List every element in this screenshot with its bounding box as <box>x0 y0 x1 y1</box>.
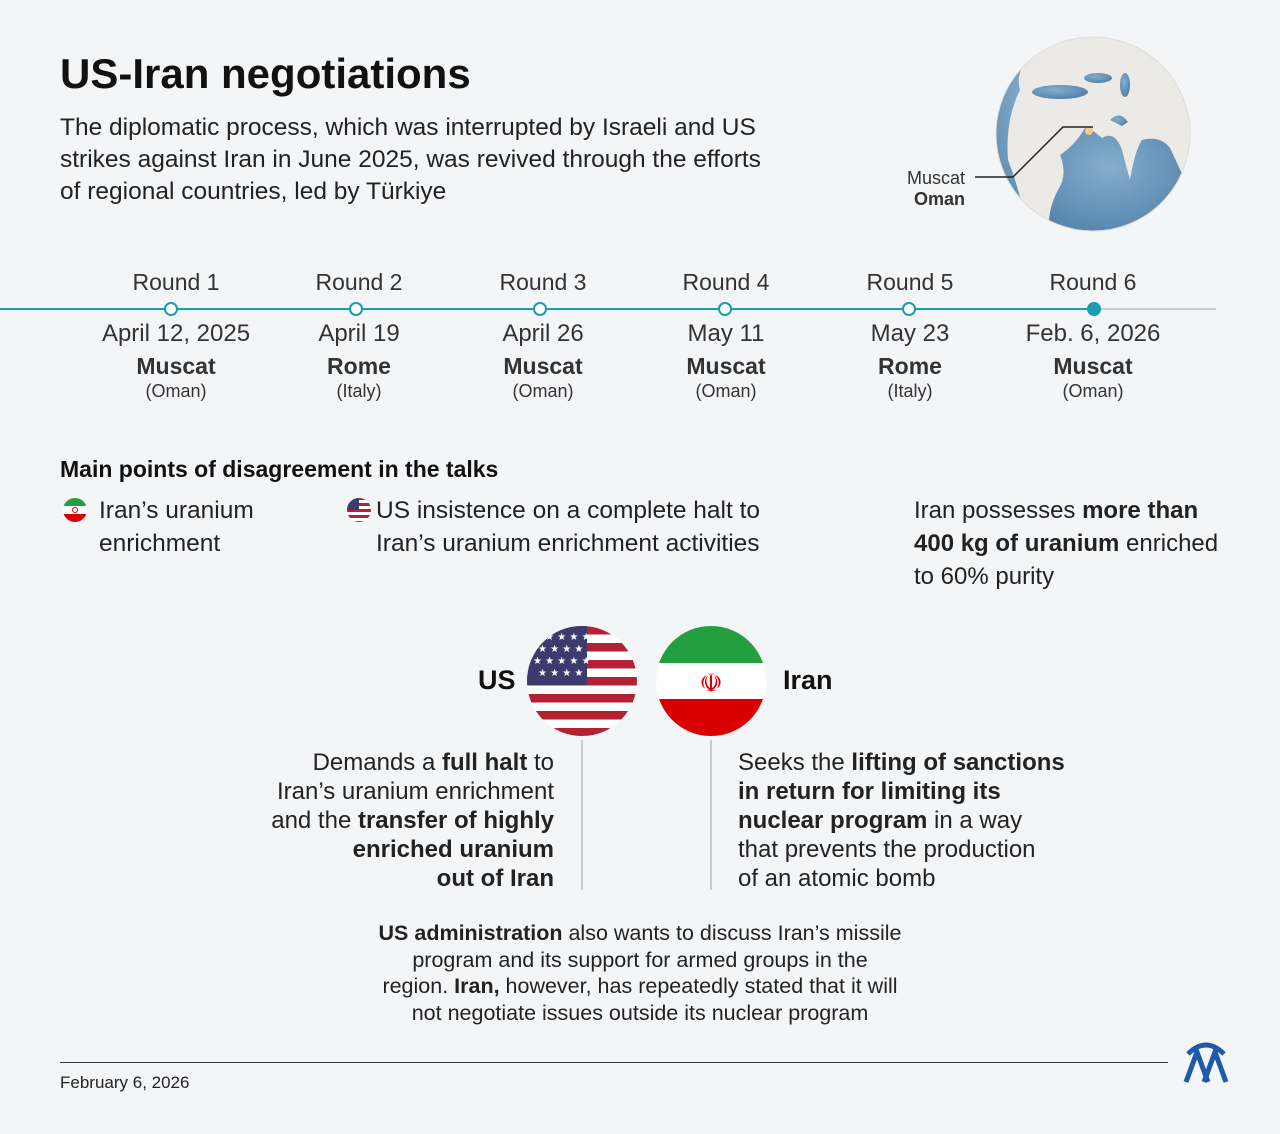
point: Iran <box>63 497 254 557</box>
date: February 6, 2026 <box>60 1073 189 1092</box>
Iran demands: nuclear program in a way <box>738 807 1022 834</box>
round 1: April 12, 2025 <box>102 320 250 347</box>
note: US administration also wants to discuss Iran’s missile <box>379 921 901 945</box>
Iran demands: Seeks the lifting of sanctions <box>738 749 1065 776</box>
round 4: May 11 <box>688 320 764 347</box>
round 1: (Oman) <box>145 381 206 401</box>
round 3 <box>500 269 586 401</box>
round 1: Round 1 <box>133 269 219 295</box>
label Iran: Iran <box>783 665 833 695</box>
timeline line <box>0 302 1216 316</box>
round 4: Muscat <box>686 353 766 379</box>
round 4 <box>683 269 769 401</box>
US flag circle: ★ ★ ★ ★ ★ <box>533 656 591 667</box>
round 6: Round 6 <box>1050 269 1136 295</box>
note: not negotiate issues outside its nuclear program <box>412 1000 868 1024</box>
round 5: Rome <box>878 353 942 379</box>
round 4: (Oman) <box>695 381 756 401</box>
round 4: Round 4 <box>683 269 769 295</box>
uranium stat: Iran possesses more than <box>914 497 1198 524</box>
round 6: Muscat <box>1053 353 1133 379</box>
uranium stat: to 60% purity <box>914 563 1054 590</box>
label US: US <box>478 665 516 695</box>
US flag circle: ★ ★ ★ ★ <box>538 668 583 679</box>
point: US: Iran’s uranium enrichment activities <box>376 530 760 557</box>
subtitle: of regional countries, led by Türkiye <box>60 178 446 205</box>
point: Iran: Iran’s uranium <box>99 497 254 524</box>
Iran demands: of an atomic bomb <box>738 865 935 892</box>
US demands: enriched uranium <box>353 836 554 863</box>
round 5: (Italy) <box>888 381 932 401</box>
logo AA <box>1184 1042 1228 1083</box>
US flag circle: ★ ★ ★ ★ <box>538 644 583 655</box>
round 2: (Italy) <box>336 381 382 401</box>
round 2: Rome <box>327 353 391 379</box>
Iran demands <box>738 749 1065 892</box>
globe map: Muscat <box>907 168 965 188</box>
globe map <box>907 36 1190 232</box>
round 1: Muscat <box>136 353 216 379</box>
subtitle: The diplomatic process, which was interrupted by Israeli and US <box>60 114 756 141</box>
round 2 <box>316 269 402 401</box>
US demands: and the transfer of highly <box>271 807 554 834</box>
round 3: (Oman) <box>512 381 574 401</box>
point: Iran: enrichment <box>99 530 220 557</box>
round 5: May 23 <box>871 320 949 347</box>
footer line <box>60 1062 1168 1063</box>
globe map: Oman <box>914 189 965 209</box>
uranium stat <box>914 497 1218 590</box>
US demands: out of Iran <box>437 865 554 892</box>
round 3: Muscat <box>503 353 583 379</box>
icon: Iran flag <box>63 498 87 522</box>
US demands: Iran’s uranium enrichment <box>277 778 554 805</box>
Iran demands: in return for limiting its <box>738 778 1001 805</box>
round 2: Round 2 <box>316 269 402 295</box>
US flag circle: ★ ★ ★ ★ ★ <box>533 632 591 643</box>
round 5: Round 5 <box>867 269 953 295</box>
US flag circle <box>527 626 637 736</box>
US demands: Demands a full halt to <box>313 749 554 776</box>
subtitle: strikes against Iran in June 2025, was revived through the efforts <box>60 146 761 173</box>
round 3: April 26 <box>502 320 584 347</box>
round 1 <box>102 269 250 401</box>
US demands <box>271 749 554 892</box>
round 6: Feb. 6, 2026 <box>1026 320 1160 347</box>
point: US <box>347 497 760 557</box>
round 3: Round 3 <box>500 269 586 295</box>
divider lines <box>581 740 712 890</box>
round 5 <box>867 269 953 401</box>
point: US: US insistence on a complete halt to <box>376 497 760 524</box>
disagreement heading: Main points of disagreement in the talks <box>60 456 498 482</box>
Iran flag circle: ☫ <box>699 669 723 699</box>
note <box>379 921 901 1024</box>
Iran flag circle <box>656 626 766 736</box>
round 6 <box>1026 269 1160 401</box>
icon: US flag <box>347 498 371 522</box>
round 6: (Oman) <box>1062 381 1124 401</box>
title: US-Iran negotiations <box>60 50 471 97</box>
note: region. Iran, however, has repeatedly stated that it will <box>382 974 898 998</box>
round 2: April 19 <box>318 320 400 347</box>
subtitle <box>60 114 761 205</box>
uranium stat: 400 kg of uranium enriched <box>914 530 1218 557</box>
Iran demands: that prevents the production <box>738 836 1036 863</box>
note: program and its support for armed groups in the <box>412 948 868 972</box>
